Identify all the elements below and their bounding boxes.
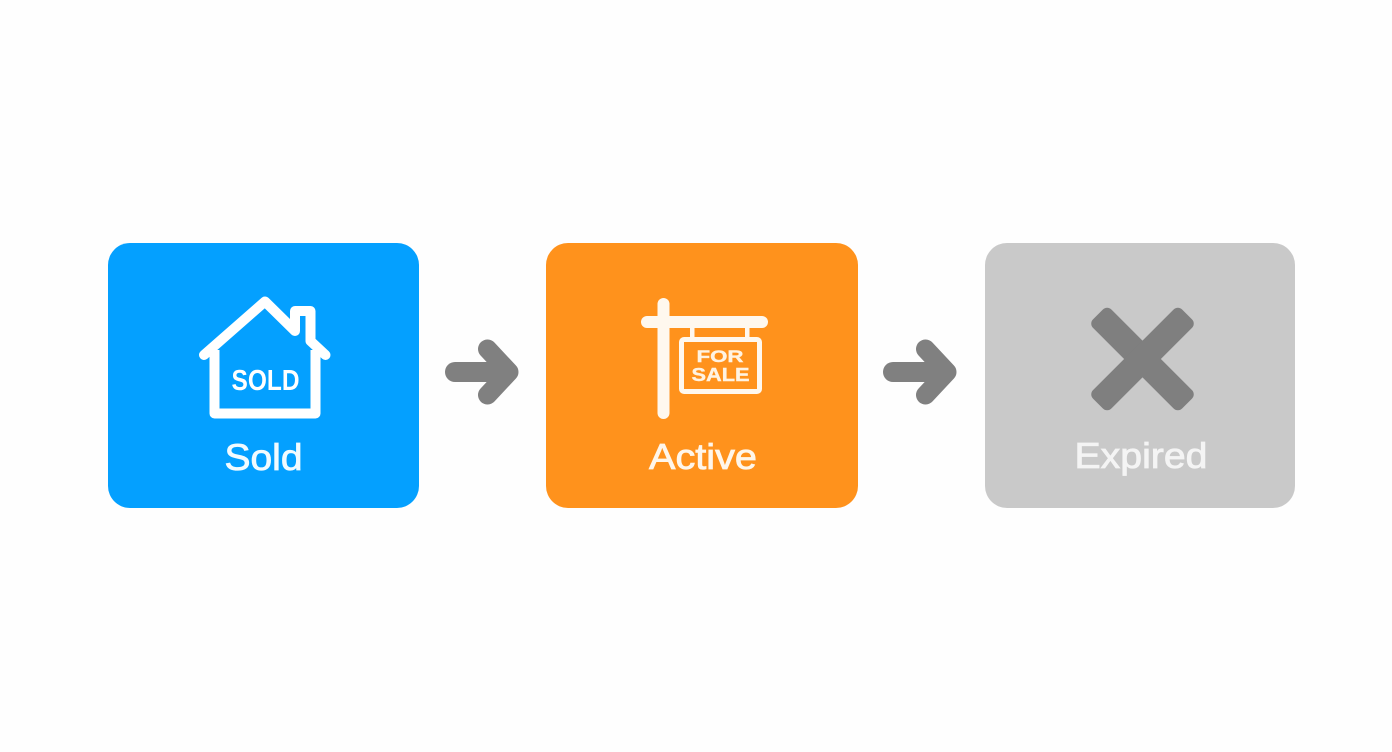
panel: expired <box>985 243 1295 508</box>
label: expired: Expired <box>1074 435 1208 476</box>
icon: for sale sign: SALE <box>692 364 750 385</box>
icon: house with sold text: SOLD <box>232 365 300 397</box>
label: active: Active <box>649 436 757 477</box>
icon: x mark <box>1053 270 1232 448</box>
panel: sold <box>108 243 419 508</box>
label: sold: Sold <box>224 437 302 478</box>
panel: active <box>546 243 858 508</box>
arrow: sold to active <box>455 349 509 395</box>
arrow: active to expired <box>893 349 947 395</box>
icon: for sale sign <box>641 298 768 419</box>
sold card background <box>108 243 419 508</box>
icon: for sale sign: FOR <box>696 347 744 366</box>
expired card background <box>985 243 1295 508</box>
icon: house with sold text <box>204 302 326 414</box>
active card background <box>546 243 858 508</box>
